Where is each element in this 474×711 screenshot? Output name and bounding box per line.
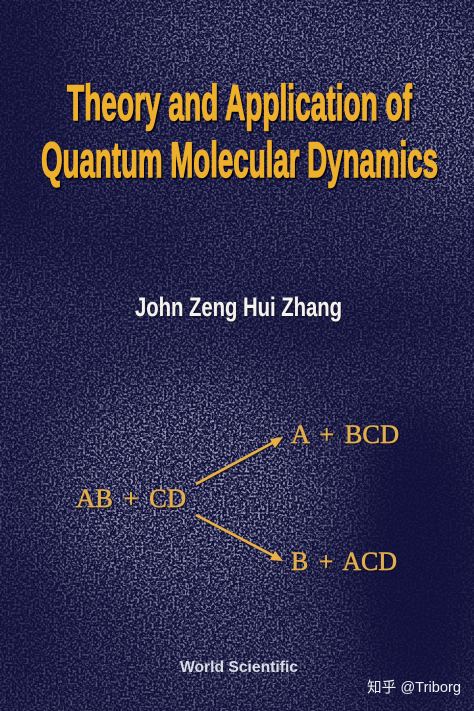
arrow up bbox=[196, 437, 283, 484]
product channel 1: A + BCD bbox=[291, 420, 399, 449]
author: John Zeng Hui Zhang bbox=[135, 292, 342, 322]
title bbox=[41, 75, 438, 188]
reaction diagram bbox=[76, 420, 399, 576]
publisher: World Scientific bbox=[180, 659, 298, 676]
reactants: AB + CD bbox=[76, 484, 186, 513]
product channel 2: B + ACD bbox=[291, 547, 397, 576]
arrow down bbox=[196, 515, 283, 561]
watermark: 知乎 @Triborg bbox=[367, 679, 461, 696]
